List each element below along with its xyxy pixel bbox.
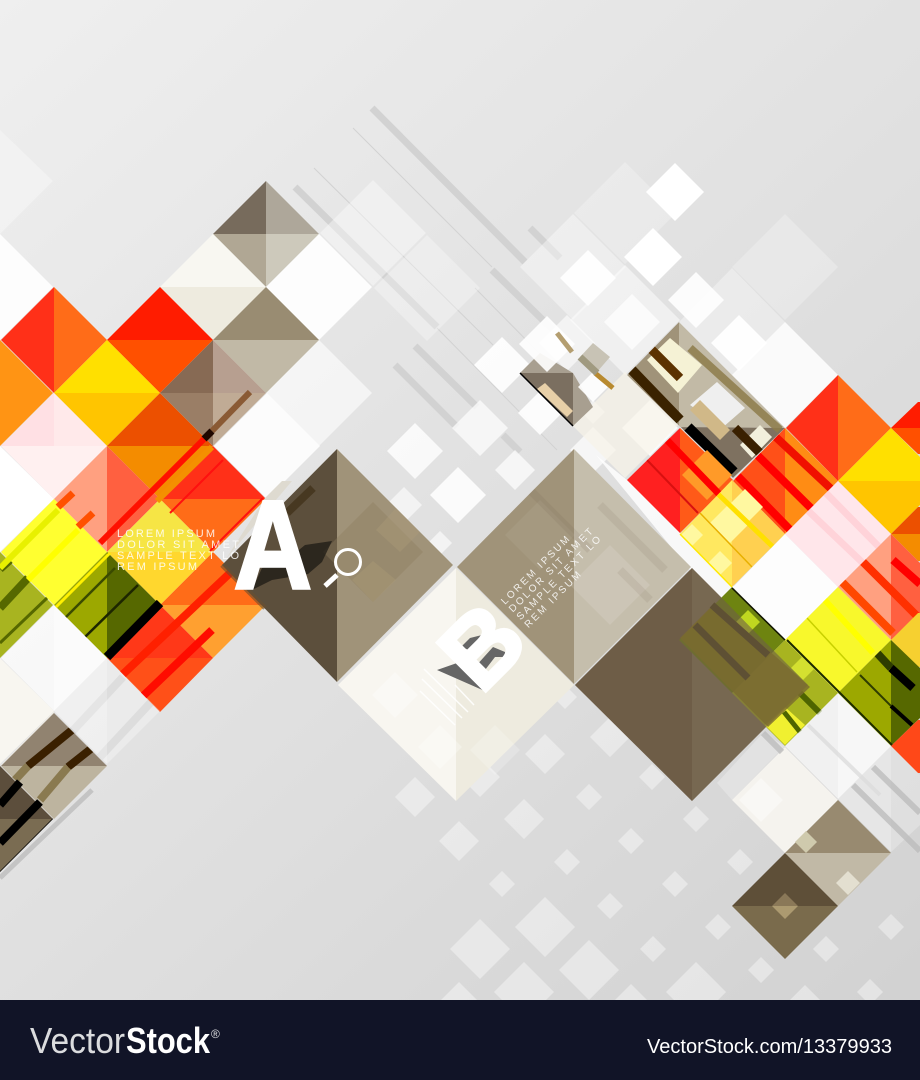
white and cream diamonds [0, 234, 372, 552]
redraw brown diamond lower right portion [575, 568, 808, 801]
yellow diamonds [1, 499, 213, 605]
diagonal stripes on the left band [0, 392, 263, 697]
text block B: SAMPLE TEXT LO [515, 534, 603, 623]
brown diamond [575, 568, 808, 801]
text block B: DOLOR SIT AMET [507, 527, 596, 615]
icon: magnifier [325, 550, 360, 586]
heading: lorem ipsum text block A [117, 528, 239, 573]
red lower diamond [107, 605, 213, 712]
olive diamonds [0, 552, 160, 658]
text block B: LOREM IPSUM [499, 534, 572, 607]
footer logo: ® [211, 1027, 220, 1041]
dark lower left diamond [0, 766, 53, 872]
yellow striped diamond [680, 480, 785, 587]
white diamond right [733, 534, 838, 640]
orange striped diamond [733, 428, 838, 534]
dark diamond lower right [732, 853, 838, 959]
footer logo [30, 1020, 220, 1061]
olive diamond right [838, 640, 920, 773]
salmon diamond right [838, 534, 920, 640]
background thin and thick diagonal lines [0, 108, 560, 878]
translucent white lower left diamonds [0, 605, 160, 765]
letter B diamond [338, 568, 574, 801]
red orange and yellow diamonds far right [786, 375, 920, 561]
letter A diamond [222, 449, 453, 682]
salmon diamond [54, 446, 160, 552]
red and orange centre diamonds [160, 446, 266, 658]
taupe lower left diamond [1, 713, 107, 819]
brown quartered diamond [160, 340, 266, 446]
taupe diamond [213, 287, 319, 393]
brown overlay block [680, 603, 810, 727]
translucent white lower right diamonds [717, 693, 920, 853]
footer url: VectorStock.com/13379933 [647, 1036, 892, 1058]
letter B shadow [437, 635, 505, 692]
gray stripes lower right [763, 725, 920, 851]
taupe quartered diamond [213, 181, 319, 287]
cream translucent diamond and white band [572, 372, 735, 602]
taupe diamond lower right [785, 800, 891, 906]
panel: left colour diamond band [0, 181, 372, 872]
taupe striped block [627, 322, 785, 478]
heading: lorem ipsum text block A: REM IPSUM [117, 561, 197, 573]
dark strip below letter A [222, 565, 265, 608]
pink diamond [1, 393, 107, 499]
panel: right colour diamond band [575, 322, 920, 959]
footer bar [0, 1000, 920, 1080]
footer logo: Vector [30, 1020, 125, 1061]
translucent white diamonds in the upper area [0, 130, 838, 555]
letter B: B [417, 581, 548, 712]
red and orange diamonds [0, 287, 213, 499]
heading: lorem ipsum text block A: DOLOR SIT AMET [117, 539, 239, 551]
panel: small taupe block [519, 316, 613, 426]
text block B [499, 519, 611, 630]
speed lines near letter B [420, 669, 474, 725]
light strip beside letter A [222, 481, 292, 565]
small diamonds in the lower area [395, 685, 904, 1022]
red diamond [627, 428, 733, 533]
pink diamond right [785, 481, 891, 587]
olive diamonds under brown overlay [679, 587, 892, 746]
yellow green diamond right [785, 587, 920, 693]
diagonal stripes on the lower left diamonds [0, 730, 92, 872]
text diamond [457, 449, 691, 684]
panel: diamonds behind the letters [222, 449, 808, 801]
text block B: REM IPSUM [523, 570, 583, 630]
letter A: A [234, 474, 312, 615]
heading: lorem ipsum text block A: LOREM IPSUM [117, 528, 215, 540]
heading: lorem ipsum text block A: SAMPLE TEXT LO [117, 550, 239, 562]
footer logo: Stock [126, 1020, 211, 1061]
letter A shadow [252, 541, 332, 590]
